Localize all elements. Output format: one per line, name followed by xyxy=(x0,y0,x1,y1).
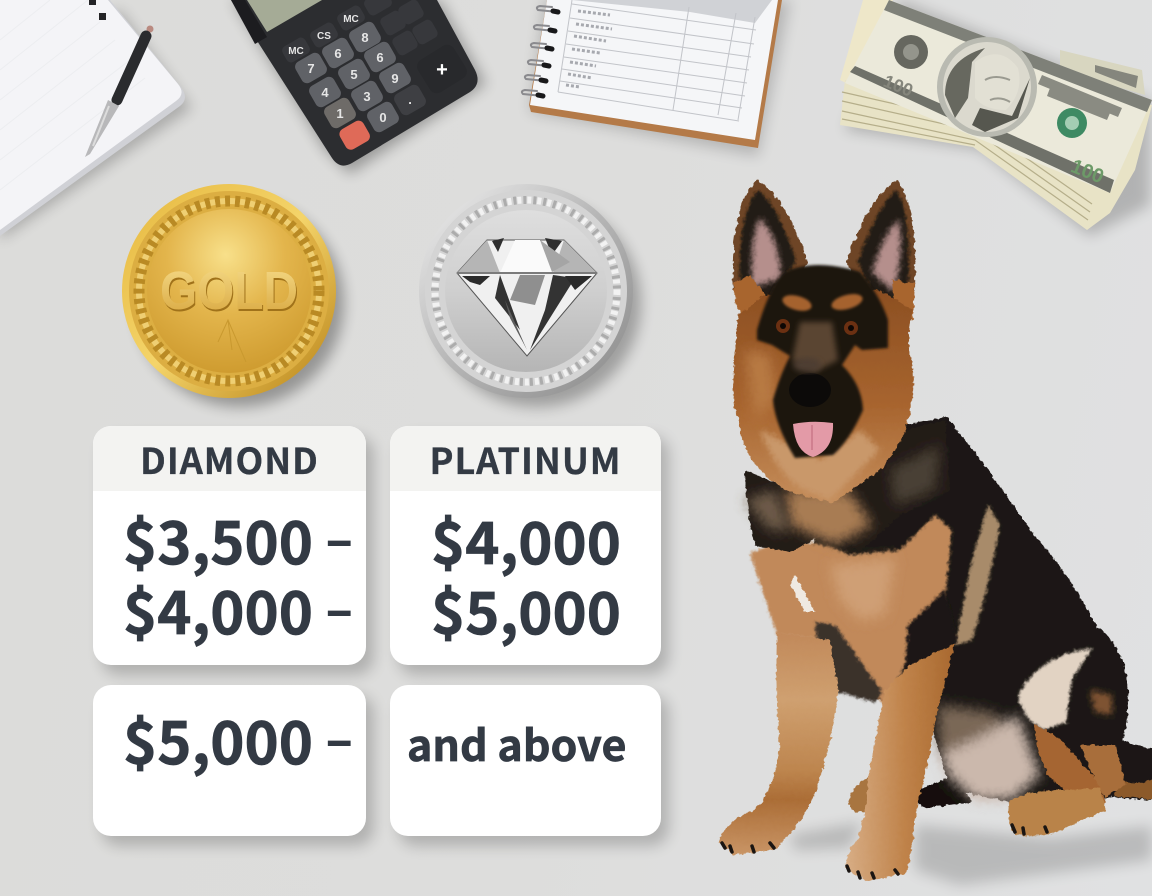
icon: calculator xyxy=(231,0,486,174)
icon: diamond coin xyxy=(419,184,641,407)
illustration: German shepherd xyxy=(719,180,1152,885)
rear paw xyxy=(1008,788,1106,836)
icon: calculator: + xyxy=(436,59,448,81)
icon: calculator: 8 xyxy=(361,30,369,45)
front leg right xyxy=(845,643,955,881)
rear leg tan xyxy=(1035,725,1106,806)
nose xyxy=(789,373,831,407)
heading: diamond: DIAMOND xyxy=(140,433,319,485)
icon: calculator: 6 xyxy=(334,46,342,61)
card: top tier and above xyxy=(390,685,661,836)
icon: stack of banknotes xyxy=(840,0,1152,236)
price: 4,000: $4,000 – xyxy=(123,567,351,651)
icon: calculator: 9 xyxy=(391,71,399,86)
cream haunch xyxy=(1018,648,1092,730)
icon: gold coin: GOLD xyxy=(160,261,298,321)
shoulder stripe xyxy=(955,505,1000,645)
icon: calculator: 5 xyxy=(350,67,358,82)
icon: notepad and pen xyxy=(0,0,192,240)
claws xyxy=(722,825,1047,878)
price: 5,000: $5,000 – xyxy=(123,697,351,781)
heading: diamond xyxy=(93,426,366,491)
icon: calculator: CS xyxy=(317,31,331,42)
card: top tier starting price xyxy=(93,685,366,836)
icon: calculator: 6 xyxy=(376,50,384,65)
neck band xyxy=(745,420,950,553)
icon: calculator: 7 xyxy=(307,61,315,76)
heading: platinum xyxy=(390,426,661,491)
icon: calculator: 4 xyxy=(321,85,329,100)
chest tan xyxy=(750,515,952,705)
ear bases tan xyxy=(733,275,770,320)
dog body with fur edge xyxy=(719,180,1152,881)
back and torso xyxy=(800,417,1128,802)
ground shadow xyxy=(790,822,1152,885)
ears xyxy=(733,180,808,330)
icon: gold coin xyxy=(122,184,344,407)
icon: calculator: 3 xyxy=(363,89,371,104)
eyes xyxy=(776,319,790,333)
icon: calculator: 1 xyxy=(336,106,344,121)
icon: spiral notebook xyxy=(522,0,790,156)
icon: calculator: MC xyxy=(343,14,359,25)
head ruff xyxy=(733,290,913,503)
icon: stack of banknotes: 100 xyxy=(881,71,916,101)
icon: calculator: . xyxy=(408,92,412,107)
heading: platinum: PLATINUM xyxy=(430,433,621,485)
icon: stack of banknotes: 100 xyxy=(1068,155,1107,188)
icon: calculator: 0 xyxy=(379,110,387,125)
far rear paw xyxy=(848,775,890,812)
card: diamond tier xyxy=(93,426,366,665)
black mask xyxy=(757,265,888,458)
price: 5,000: $5,000 xyxy=(431,567,621,651)
price: 4,000: $4,000 xyxy=(431,497,621,581)
tongue xyxy=(793,422,833,457)
tail xyxy=(1105,738,1152,800)
face detail xyxy=(757,265,888,458)
belly xyxy=(938,705,1040,800)
text: and above: and above xyxy=(407,712,627,774)
price: 3,500: $3,500 – xyxy=(123,497,351,581)
icon: calculator: MC xyxy=(288,46,304,57)
front leg left xyxy=(719,633,838,855)
card: platinum tier xyxy=(390,426,661,665)
bill face xyxy=(845,0,1152,193)
icon: gold coin: GOLD xyxy=(161,263,299,323)
